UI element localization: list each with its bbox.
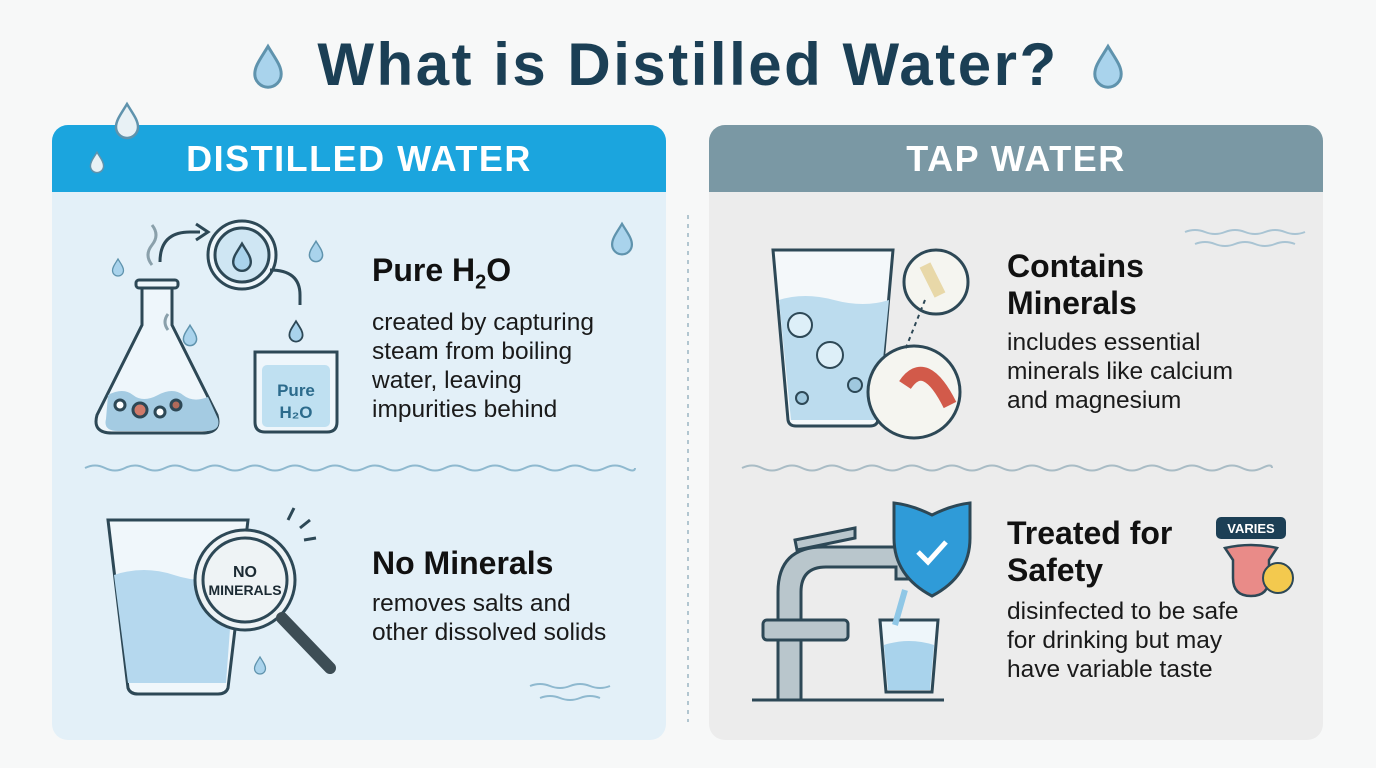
icon: glass with minerals (773, 250, 968, 438)
text: treated for safety: Safety (1007, 552, 1103, 588)
icon: title drops (90, 46, 1121, 674)
text: no minerals: other dissolved solids (372, 619, 606, 646)
panel: tap water (709, 125, 1323, 740)
header: distilled water (52, 125, 666, 192)
text: treated for safety: for drinking but may (1007, 627, 1222, 654)
text: contains minerals: Contains (1007, 248, 1144, 284)
label: beaker pure h2o: Pure (277, 381, 315, 400)
text: pure h2o (372, 252, 594, 423)
text: contains minerals: and magnesium (1007, 387, 1181, 414)
title: What is Distilled Water? (317, 31, 1059, 98)
icons layer: H₂O (279, 403, 313, 422)
text: pure h2o: steam from boiling (372, 338, 572, 365)
icon: varies tongue (1216, 517, 1293, 596)
text: contains minerals: Minerals (1007, 285, 1137, 321)
icon: varies tongue: VARIES (1227, 521, 1275, 536)
text: contains minerals: minerals like calcium (1007, 358, 1233, 385)
header: tap water (709, 125, 1323, 192)
icons layer: NO (233, 564, 257, 581)
text: no minerals: No Minerals (372, 545, 553, 581)
text: pure h2o: water, leaving (372, 367, 522, 394)
panel: distilled water (52, 125, 666, 740)
header: distilled water: DISTILLED WATER (186, 138, 532, 179)
text: treated for safety: disinfected to be safe (1007, 598, 1239, 625)
text: pure h2o: created by capturing (372, 309, 594, 336)
text: no minerals: removes salts and (372, 590, 571, 617)
text: no minerals (372, 545, 606, 646)
text: contains minerals (1007, 248, 1233, 414)
icon: faucet and shield (752, 503, 970, 700)
text: pure h2o: Pure H2O (372, 252, 511, 293)
icons layer: MINERALS (208, 582, 282, 598)
text: pure h2o: impurities behind (372, 396, 557, 423)
header: tap water: TAP WATER (906, 138, 1126, 179)
text: treated for safety: have variable taste (1007, 656, 1213, 683)
text: treated for safety: Treated for (1007, 515, 1172, 551)
waves (85, 230, 1305, 700)
text: contains minerals: includes essential (1007, 329, 1200, 356)
divider line (687, 215, 689, 722)
icon: glass with magnifier (108, 508, 330, 694)
icon: flask distillation (96, 221, 337, 433)
text: treated for safety (1007, 515, 1239, 683)
